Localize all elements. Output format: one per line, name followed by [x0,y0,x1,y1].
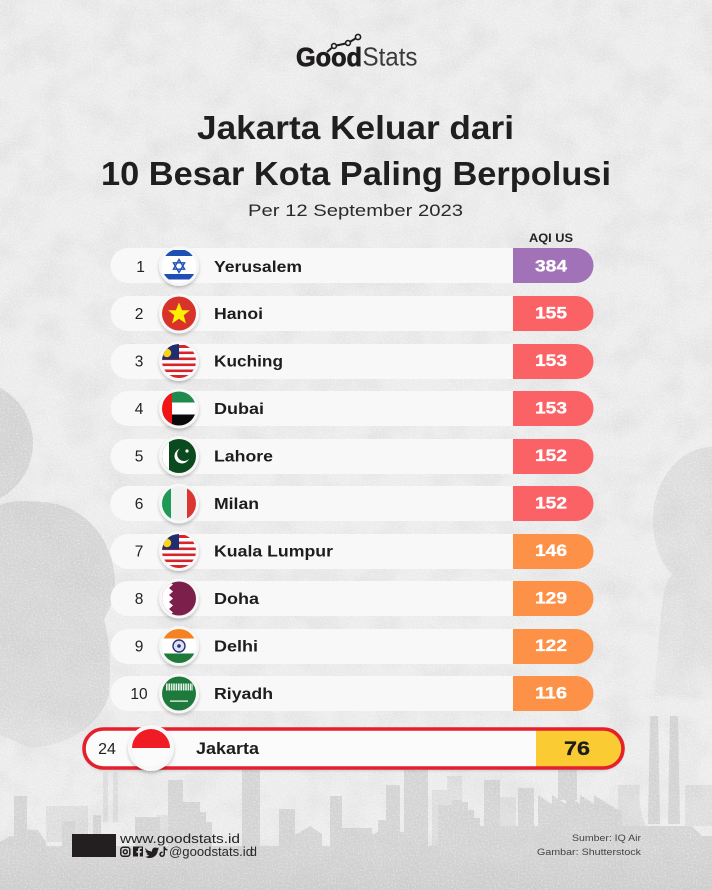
row 6: Milan: 6 [135,496,143,513]
row 5: Lahore: Lahore [214,448,273,466]
row 8: Doha: 129 [535,590,567,608]
footer: social icons [121,846,168,858]
source credit [537,833,641,858]
footer: social handle: @goodstats.id [169,845,253,859]
row 7: Kuala Lumpur [110,531,594,571]
icon: India flag [159,626,199,666]
icon: Malaysia flag [159,531,199,571]
background: right smoke cloud [653,447,712,700]
row 5: Lahore [110,436,594,476]
icon: Saudi Arabia flag [159,674,199,714]
row 1: Yerusalem: Yerusalem [214,259,302,276]
background: ground band [0,846,712,890]
icon: Israel flag [159,246,199,286]
row 3: Kuching [110,341,594,381]
source credit: Sumber: IQ Air [572,833,641,844]
column header: AQI US: AQI US [529,231,573,245]
row 4: Dubai [110,388,594,428]
icon: Pakistan flag [159,436,199,476]
row 10: Riyadh: 116 [535,684,567,702]
row 3: Kuching: 3 [135,354,143,370]
icon: facebook [133,846,143,856]
row 7: Kuala Lumpur: Kuala Lumpur [214,544,333,560]
icon: Qatar flag [159,578,199,618]
row highlight: Jakarta: 76 [564,739,590,760]
row 6: Milan: 152 [535,494,567,512]
icon: Italy flag [159,484,199,524]
row 9: Delhi: 9 [135,638,143,656]
icon: Vietnam flag [159,294,199,334]
row 4: Dubai: 4 [135,401,144,418]
row highlight: Jakarta: Jakarta [196,740,260,758]
title [101,109,611,192]
row 5: Lahore: 152 [535,447,567,465]
title: 10 Besar Kota Paling Berpolusi [101,155,611,192]
background: left smoke cloud [0,380,115,748]
icon: instagram [121,847,130,856]
row 6: Milan: Milan [214,496,259,513]
footer: website: www.goodstats.id [119,832,240,846]
row 3: Kuching: 153 [535,352,567,370]
row 4: Dubai: Dubai [214,401,264,418]
row 1: Yerusalem: 384 [535,258,568,276]
logo: GoodStats: Good [296,42,362,72]
row highlight: Jakarta [84,725,623,771]
row 2: Hanoi: 2 [135,306,143,323]
row 10: Riyadh: Riyadh [214,686,273,703]
row 9: Delhi: Delhi [214,638,258,656]
icon: Malaysia flag [159,341,199,381]
row highlight: Jakarta: 24 [98,741,116,758]
footer: social handle: d [250,845,257,859]
footer: black label block [72,834,116,857]
row 1: Yerusalem: 1 [136,259,145,276]
logo: GoodStats: Stats [362,42,418,72]
icon: twitter [145,847,159,858]
source credit: Gambar: Shutterstock [537,847,641,858]
icon: tiktok [159,846,168,857]
logo chart line [327,34,361,52]
row 8: Doha: Doha [214,591,259,608]
row 9: Delhi [110,626,594,666]
row 7: Kuala Lumpur: 7 [135,544,143,560]
logo: GoodStats [296,34,418,72]
row 8: Doha [110,578,594,618]
icon: Indonesia flag [128,725,174,771]
row 10: Riyadh [110,674,594,714]
icon: UAE flag [159,388,199,428]
row 2: Hanoi: Hanoi [214,306,263,323]
row 9: Delhi: 122 [535,637,567,655]
row 3: Kuching: Kuching [214,354,283,370]
row 4: Dubai: 153 [535,400,567,418]
row 6: Milan [110,484,594,524]
row 10: Riyadh: 10 [130,686,148,703]
row 7: Kuala Lumpur: 146 [535,542,567,560]
row 5: Lahore: 5 [135,448,143,466]
subtitle: Per 12 September 2023 [248,201,463,220]
title: Jakarta Keluar dari [197,109,514,146]
row 1: Yerusalem [110,246,594,286]
row 8: Doha: 8 [135,591,143,608]
row 2: Hanoi: 155 [535,304,567,322]
background: city skyline [0,716,712,890]
row 2: Hanoi [110,294,594,334]
